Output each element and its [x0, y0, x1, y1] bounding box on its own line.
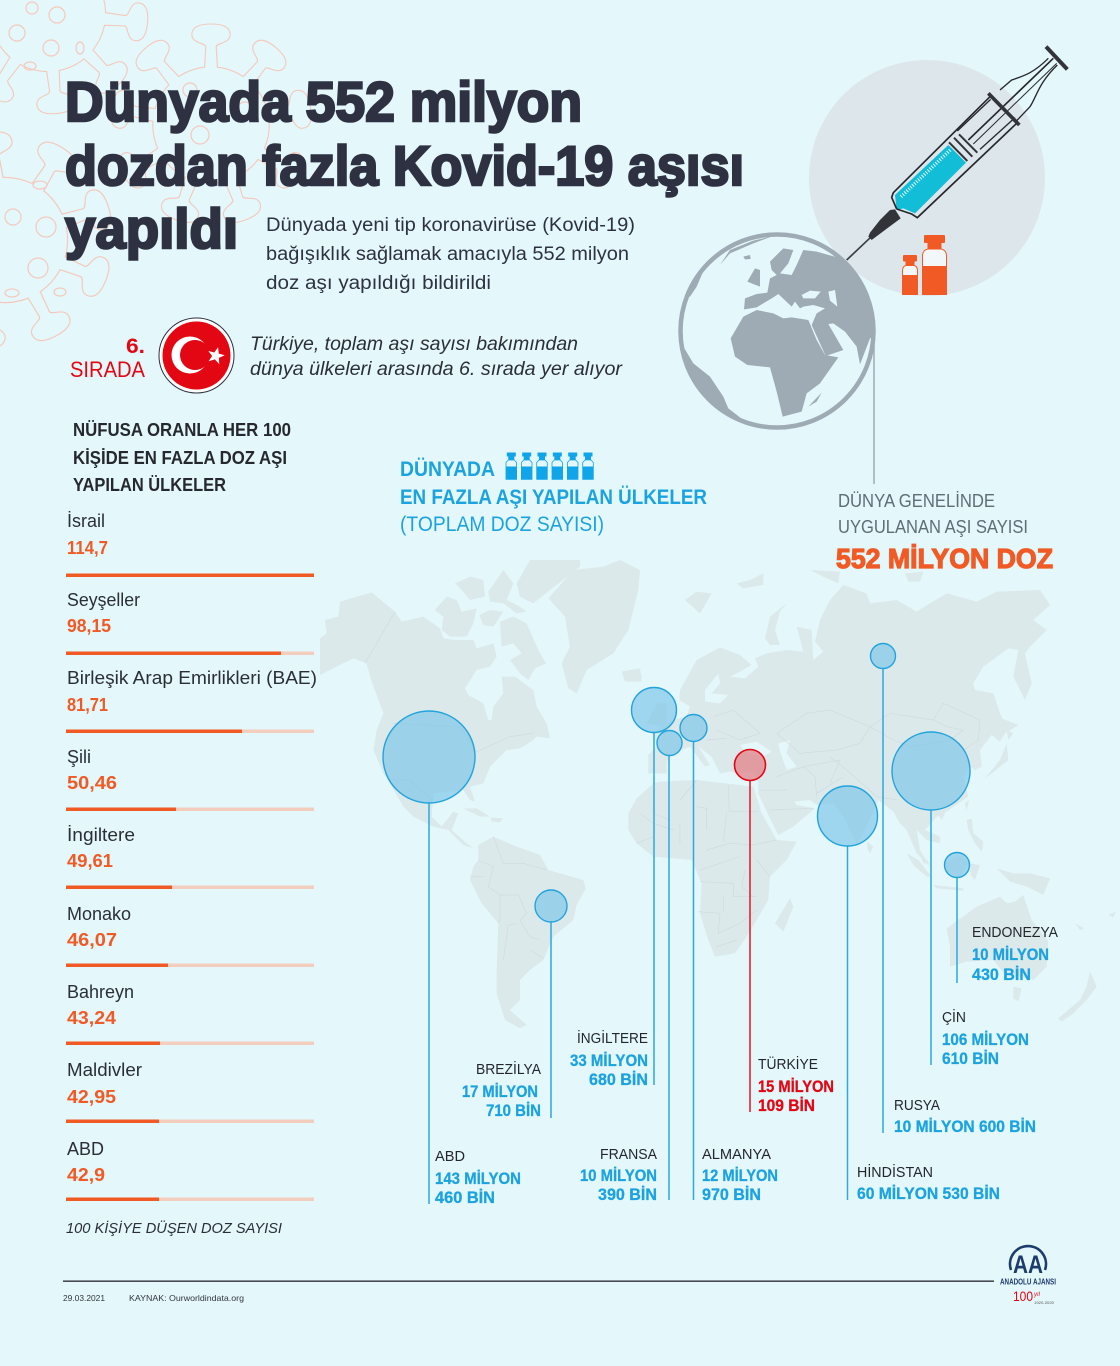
label: İngiltere: 33 MİLYON	[570, 1051, 648, 1070]
label: Hindistan	[857, 1163, 1000, 1203]
bar: Seyşeller	[66, 590, 314, 655]
map heading	[400, 458, 707, 536]
label: Çin: 610 BİN	[942, 1049, 999, 1068]
label: İngiltere	[570, 1029, 648, 1089]
bar: ABD: ABD	[67, 1139, 104, 1159]
world total callout	[836, 491, 1053, 574]
label: Rusya	[894, 1098, 1036, 1136]
bar: Monako: Monako	[67, 904, 131, 924]
map heading: (TOPLAM DOZ SAYISI)	[400, 513, 604, 536]
title	[65, 70, 744, 260]
bubble: Endonezya	[944, 852, 970, 983]
footer: KAYNAK: Ourworldindata.org	[129, 1293, 244, 1303]
icon: globe	[678, 234, 878, 432]
bar: İngiltere	[66, 825, 314, 889]
label: Türkiye: TÜRKİYE	[758, 1055, 818, 1073]
map heading: EN FAZLA AŞI YAPILAN ÜLKELER	[400, 486, 707, 509]
bubble: Türkiye	[734, 750, 766, 1112]
world total callout: UYGULANAN AŞI SAYISI	[838, 517, 1028, 537]
bar: Bahreyn	[66, 982, 314, 1045]
label: Fransa: FRANSA	[600, 1147, 657, 1163]
bar: İsrail: İsrail	[67, 511, 105, 531]
label: Brezilya: BREZİLYA	[476, 1060, 541, 1078]
bubble: Hindistan	[818, 786, 878, 1200]
bubble: Rusya	[870, 644, 896, 1133]
per-100 chart heading: NÜFUSA ORANLA HER 100	[73, 420, 291, 440]
footer	[63, 1280, 994, 1303]
label: Almanya	[702, 1147, 778, 1204]
bar: İngiltere: 49,61	[67, 851, 113, 871]
bubble: Almanya	[680, 714, 707, 1200]
world total callout: DÜNYA GENELİNDE	[838, 491, 995, 511]
logo: Anadolu Ajansı	[1000, 1246, 1056, 1305]
icon: Turkish flag	[159, 318, 234, 393]
icon: six vials	[506, 452, 593, 479]
label: Endonezya: ENDONEZYA	[972, 925, 1058, 941]
Turkey note: Türkiye, toplam aşı sayısı bakımından	[250, 334, 578, 355]
label: Fransa: 390 BİN	[598, 1185, 657, 1204]
bar chart: doses per 100 people	[66, 511, 317, 1201]
bar: Seyşeller: 98,15	[67, 616, 111, 636]
bar: Şili	[66, 747, 314, 811]
bubble: Fransa	[657, 730, 682, 1200]
bar: ABD: 42,9	[67, 1165, 105, 1185]
label: Almanya: ALMANYA	[702, 1147, 771, 1163]
label: Endonezya: 430 BİN	[972, 965, 1031, 984]
label: Hindistan: HİNDİSTAN	[857, 1163, 933, 1181]
logo: Anadolu Ajansı: AA	[1013, 1251, 1043, 1279]
chart note: 100 KİŞİYE DÜŞEN DOZ SAYISI	[66, 1219, 282, 1237]
bar: İsrail	[66, 511, 314, 577]
bar: Maldivler	[66, 1060, 314, 1123]
label: Brezilya: 710 BİN	[486, 1101, 541, 1120]
bar: Monako	[66, 904, 314, 967]
bar: Maldivler: Maldivler	[67, 1060, 142, 1080]
label: İngiltere: 680 BİN	[589, 1070, 648, 1089]
label: ABD: 143 MİLYON	[435, 1169, 521, 1188]
bar: Bahreyn: Bahreyn	[67, 982, 134, 1002]
label: Türkiye	[758, 1055, 834, 1115]
intro text: Dünyada yeni tip koronavirüse (Kovid-19)	[266, 215, 635, 236]
illustration: grey circle	[809, 60, 1045, 296]
rank label: SIRADA	[70, 357, 145, 382]
label: Almanya: 12 MİLYON	[702, 1166, 778, 1185]
label: Endonezya: 10 MİLYON	[972, 945, 1049, 964]
icon: medicine vials	[902, 235, 946, 295]
decorative virus outlines	[0, 0, 313, 363]
bar: BAE: Birleşik Arap Emirlikleri (BAE)	[67, 668, 317, 688]
per-100 chart heading: KİŞİDE EN FAZLA DOZ AŞI	[73, 448, 287, 468]
bubble: Brezilya	[535, 890, 567, 1118]
bubble: Çin	[892, 732, 970, 1065]
label: Rusya: 10 MİLYON 600 BİN	[894, 1117, 1036, 1136]
logo: Anadolu Ajansı: ANADOLU AJANSI	[1000, 1278, 1056, 1286]
bar: Maldivler: 42,95	[67, 1087, 116, 1107]
label: Çin: 106 MİLYON	[942, 1030, 1029, 1049]
bar: Seyşeller: Seyşeller	[67, 590, 140, 610]
label: Fransa: 10 MİLYON	[580, 1166, 657, 1185]
label: Rusya: RUSYA	[894, 1098, 940, 1114]
label: Almanya: 970 BİN	[702, 1185, 761, 1204]
label: Brezilya	[462, 1060, 541, 1120]
title: Dünyada 552 milyon	[65, 70, 582, 133]
label: Endonezya	[972, 925, 1058, 984]
bar: İngiltere: İngiltere	[67, 825, 135, 845]
rank label	[70, 335, 145, 382]
label: İngiltere: İNGİLTERE	[577, 1029, 648, 1047]
label: Çin	[942, 1008, 1029, 1068]
bar: Bahreyn: 43,24	[67, 1008, 116, 1028]
bar: Şili: 50,46	[67, 773, 117, 793]
bar: Şili: Şili	[67, 747, 91, 767]
Turkey note	[250, 334, 623, 380]
label: Hindistan: 60 MİLYON 530 BİN	[857, 1184, 1000, 1203]
pointer line from globe	[873, 330, 875, 484]
world total callout: 552 MİLYON DOZ	[836, 543, 1053, 574]
title: dozdan fazla Kovid-19 aşısı	[65, 134, 744, 197]
title: yapıldı	[65, 197, 238, 260]
intro text: doz aşı yapıldığı bildirildi	[266, 273, 491, 294]
label: Çin: ÇİN	[942, 1008, 966, 1026]
per-100 chart heading: YAPILAN ÜLKELER	[73, 475, 226, 495]
label: Brezilya: 17 MİLYON	[462, 1082, 538, 1101]
world map	[320, 560, 1116, 1028]
label: ABD	[435, 1149, 521, 1207]
bar: ABD	[66, 1139, 314, 1201]
rank label: 6.	[126, 335, 145, 358]
per-100 chart heading	[73, 420, 291, 495]
bar: İsrail: 114,7	[67, 538, 108, 558]
map heading: DÜNYADA	[400, 458, 495, 481]
icon: syringe	[847, 47, 1067, 260]
label: ABD: 460 BİN	[435, 1188, 495, 1207]
footer: 29.03.2021	[63, 1293, 105, 1303]
bar: BAE	[66, 668, 317, 733]
label: Türkiye: 15 MİLYON	[758, 1077, 834, 1096]
intro text: bağışıklık sağlamak amacıyla 552 milyon	[266, 244, 629, 265]
intro text	[266, 215, 635, 294]
logo: Anadolu Ajansı: yıl	[1033, 1292, 1041, 1298]
Turkey note: dünya ülkeleri arasında 6. sırada yer alıyor	[250, 359, 623, 380]
label: ABD: ABD	[435, 1149, 465, 1165]
bubble: ABD	[383, 711, 475, 1204]
bar: BAE: 81,71	[67, 695, 108, 715]
logo: Anadolu Ajansı: 1920-2020	[1034, 1300, 1055, 1305]
label: Türkiye: 109 BİN	[758, 1096, 815, 1115]
bubble: İngiltere	[632, 688, 676, 1085]
logo: Anadolu Ajansı: 100	[1013, 1288, 1033, 1304]
bar: Monako: 46,07	[67, 930, 117, 950]
label: Fransa	[580, 1147, 657, 1204]
